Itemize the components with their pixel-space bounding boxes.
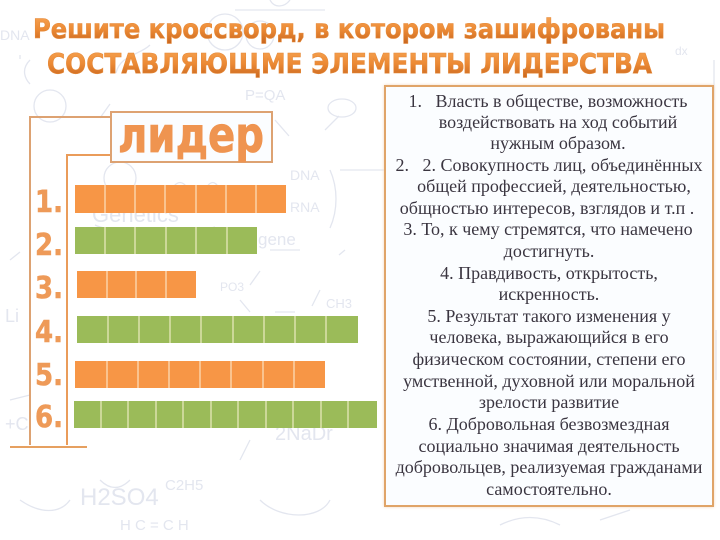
panel: crossword clues: 5. Результат такого изменения у — [427, 306, 671, 326]
crossword row 6 — [74, 401, 377, 428]
crossword row 1 — [75, 185, 286, 213]
background formula labels: Genetics — [92, 202, 179, 227]
panel: crossword clues: достигнуть. — [504, 241, 594, 261]
panel: crossword clues: воздействовать на ход событий — [439, 112, 677, 132]
background formula labels: DNA — [0, 27, 30, 43]
panel: crossword clues: общей профессией, деятельностью, — [417, 176, 691, 196]
crossword row 5 — [75, 361, 325, 388]
panel: crossword clues: добровольцев, реализуемая гражданами — [396, 457, 702, 477]
background formula labels: C2H5 — [165, 477, 203, 494]
row numbers: 5. — [35, 358, 63, 393]
background formula labels: gene — [258, 230, 296, 249]
panel: crossword clues: нужным образом. — [490, 133, 626, 153]
row numbers: 6. — [35, 400, 63, 435]
background formula labels: dx — [675, 44, 688, 58]
panel: crossword clues: зрелости развитие — [479, 392, 619, 412]
panel: crossword clues: 4. Правдивость, открытость, — [440, 263, 658, 283]
panel: crossword clues: общностью интересов, взглядов и т.п . — [400, 198, 694, 218]
crossword row 3 — [77, 271, 196, 298]
title — [33, 14, 665, 80]
row numbers: 1. — [35, 185, 63, 220]
title: СОСТАВЛЯЮЩМЕ ЭЛЕМЕНТЫ ЛИДЕРСТВА — [47, 47, 652, 80]
title: Решите кроссворд, в котором зашифрованы — [33, 14, 665, 45]
background formula labels: CH3 — [326, 296, 352, 311]
panel: crossword clues: физическом состоянии, степени его — [413, 349, 685, 369]
panel: crossword clues: 2. 2. Совокупность лиц, объединённых — [396, 155, 702, 175]
background formula labels: H2SO4 — [80, 484, 159, 511]
panel: crossword clues: 1. Власть в обществе, возможность — [408, 91, 688, 111]
background formula labels: H C = C H — [120, 517, 189, 534]
crossword row 4 — [77, 316, 358, 343]
crossword row 2 — [75, 227, 257, 254]
panel: crossword clues: социально значимая деятельность — [418, 436, 680, 456]
row numbers: 4. — [35, 315, 63, 350]
row numbers: 3. — [35, 271, 63, 306]
background formula labels: PO3 — [220, 280, 244, 294]
background formula labels: +C — [5, 414, 29, 434]
background formula labels: 2NaDr — [275, 423, 333, 445]
panel: crossword clues: искренность. — [499, 284, 599, 304]
background formula labels: DNA — [290, 167, 320, 183]
background formula labels: P=QA — [245, 87, 285, 104]
background formula labels: Li — [5, 306, 19, 326]
word box: лидер: лидер — [118, 107, 264, 164]
background formula labels: RNA — [290, 199, 320, 215]
panel: crossword clues: самостоятельно. — [486, 479, 612, 499]
row numbers — [35, 185, 63, 435]
connector lines — [10, 117, 111, 447]
panel: crossword clues: умственной, духовной или моральной — [403, 371, 695, 391]
panel: crossword clues — [384, 85, 714, 507]
row numbers: 2. — [35, 228, 63, 263]
panel: crossword clues: 3. То, к чему стремятся, что намечено — [403, 219, 693, 239]
panel: crossword clues: человека, выражающийся в его — [429, 327, 669, 347]
panel: crossword clues: 6. Добровольная безвозмездная — [428, 414, 670, 434]
